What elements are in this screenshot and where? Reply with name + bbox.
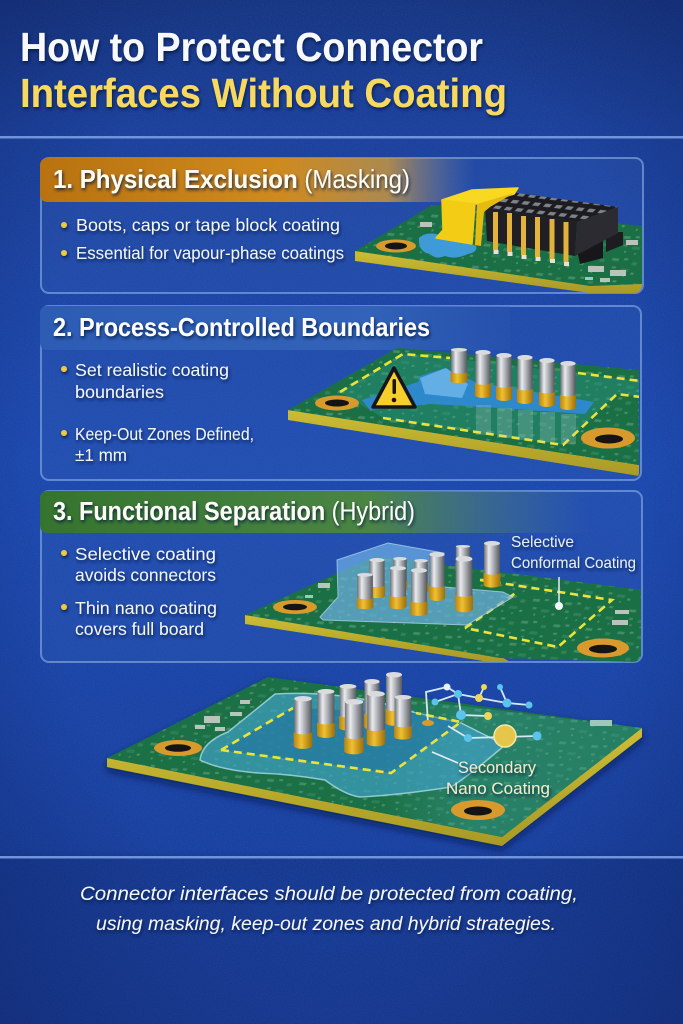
coating spill [419, 234, 476, 258]
bullets: step 2 [61, 360, 254, 465]
title: How to Protect Connector [20, 24, 483, 70]
keep-out dashed line [340, 354, 640, 445]
footer statement [80, 884, 578, 935]
yellow masking boot [436, 188, 518, 246]
nano coating haze on right side [380, 696, 642, 837]
illustration: keep-out boundary on board [288, 348, 640, 476]
selective coating dashed zone [465, 580, 612, 647]
illustration: masked connector on board [355, 188, 642, 293]
nano coating layer [200, 693, 505, 797]
header: step 3: 3. Functional Separation (Hybrid) [53, 498, 415, 526]
bullets: step 3: Selective coating [75, 544, 216, 564]
bullets: step 3: Thin nano coating [75, 598, 217, 618]
mounting holes [273, 600, 629, 658]
panel: functional separation [40, 491, 642, 662]
panel: physical exclusion [40, 158, 643, 293]
gold pins [493, 212, 569, 266]
bullets: step 2: ±1 mm [75, 445, 127, 465]
warning icon [373, 368, 415, 407]
label: selective conformal coating [511, 534, 636, 572]
footer statement: using masking, keep-out zones and hybrid strategies. [96, 914, 556, 935]
label: secondary nano coating: Secondary [458, 759, 537, 777]
keep-out dashed line [221, 708, 461, 773]
header: step 1: 1. Physical Exclusion (Masking) [53, 164, 410, 194]
mounting hole [376, 240, 416, 252]
label: selective conformal coating: Selective [511, 534, 574, 551]
header: step 2: 2. Process-Controlled Boundaries [53, 312, 430, 342]
connector housing [485, 193, 623, 264]
bullets: step 2: Keep-Out Zones Defined, [75, 424, 254, 444]
header: step 3 [40, 491, 590, 533]
icon: nano molecule [422, 684, 542, 747]
mounting holes [315, 396, 635, 448]
illustration: hybrid board with nano coating [107, 672, 642, 846]
header: step 2 [40, 306, 510, 350]
label: secondary nano coating: Nano Coating [446, 780, 550, 798]
bullets: step 1: Boots, caps or tape block coating [76, 215, 340, 235]
coated keep-out interior [221, 708, 461, 773]
bullets: step 3: avoids connectors [75, 565, 216, 585]
footer band [0, 856, 683, 935]
title: Interfaces Without Coating [20, 70, 507, 116]
illustration: selective coating on board [245, 541, 642, 662]
connector pins [294, 672, 412, 754]
teal keep-out zone tint [340, 354, 640, 445]
header: step 1 [40, 158, 475, 202]
bullets: step 2: boundaries [75, 382, 164, 402]
bullets: step 2: Set realistic coating [75, 360, 229, 380]
surface components [420, 222, 638, 282]
label: secondary nano coating [432, 752, 550, 798]
bullets: step 3 [61, 544, 217, 639]
label: selective conformal coating: Conformal Coating [511, 555, 636, 572]
connector pins [450, 348, 576, 410]
footer statement: Connector interfaces should be protected from coating, [80, 884, 578, 905]
panel: process-controlled boundaries [40, 306, 641, 480]
bullets: step 1: Essential for vapour-phase coatings [76, 243, 344, 263]
surface components [305, 583, 629, 625]
leader line and dot [555, 577, 563, 610]
title [20, 24, 507, 116]
bullets: step 3: covers full board [75, 619, 204, 639]
surface components [195, 700, 612, 731]
pin reflections [476, 405, 576, 444]
mounting holes [154, 740, 505, 820]
clear conformal coating shell [320, 543, 513, 625]
coating overflow [362, 368, 594, 414]
connector pins [357, 541, 500, 616]
bullets: step 1 [61, 215, 344, 263]
